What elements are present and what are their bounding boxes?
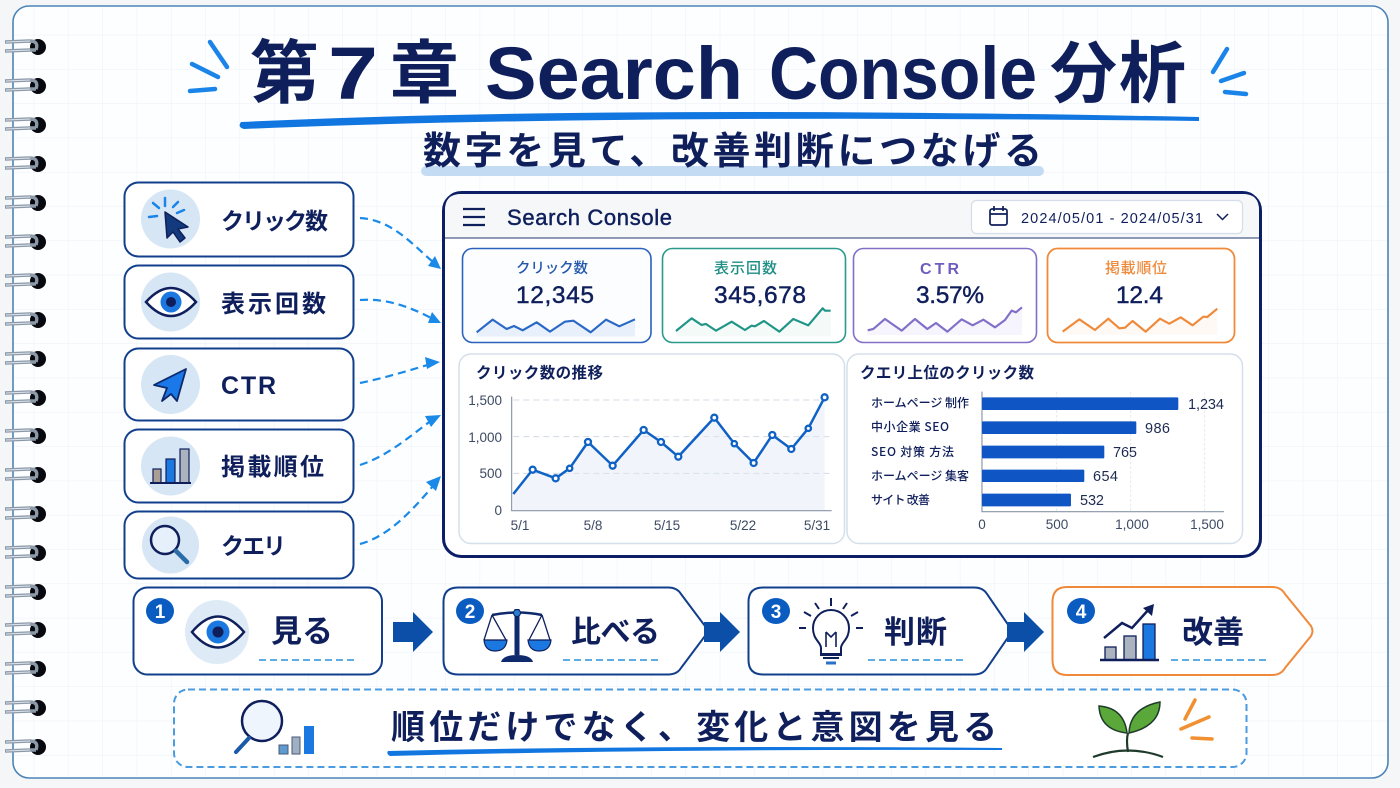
title: 析 <box>1119 20 1186 117</box>
title underline <box>240 112 1199 129</box>
title: Console <box>769 32 1037 115</box>
KPI card: CTR <box>854 248 1036 342</box>
bar values: 986 <box>1145 421 1170 437</box>
subtitle highlight <box>421 166 1044 176</box>
KPI card: 掲載順位 <box>1048 248 1234 342</box>
step 3: 判断 <box>748 588 1010 674</box>
date range selector: 2024/05/01 - 2024/05/31 <box>1021 211 1203 227</box>
x axis labels <box>511 518 830 533</box>
KPI card: クリック数: 12,345 <box>516 282 594 309</box>
icon: title sparks left <box>190 42 227 91</box>
badge 4: 4 <box>1076 602 1087 623</box>
panel: dashboard <box>444 192 1260 556</box>
metric: クエリ: クエリ <box>221 527 286 561</box>
query labels: ホームページ 制作 <box>871 394 969 411</box>
gridlines and bars <box>982 392 1224 512</box>
KPI card: クリック数 <box>462 248 651 342</box>
step 4: 改善 <box>1052 587 1312 675</box>
KPI card: 表示回数 <box>662 248 846 342</box>
panel: key message <box>174 690 1246 767</box>
icon: growth chart <box>1100 604 1159 660</box>
query labels: サイト 改善 <box>871 491 930 508</box>
icon: light bulb <box>799 598 863 663</box>
x axis labels: 5/8 <box>584 518 602 533</box>
icon: title sparks right <box>1213 49 1246 94</box>
metric: 掲載順位: 掲載順位 <box>221 447 324 482</box>
y axis labels: 0 <box>494 503 502 518</box>
KPI card: クリック数: クリック数 <box>516 257 588 278</box>
arrow 3 <box>1007 612 1044 652</box>
x axis labels: 1,000 <box>1115 517 1149 532</box>
step 1: 見る <box>134 588 382 674</box>
query labels: ホームページ 集客 <box>871 467 969 484</box>
query labels: 中小企業 SEO <box>871 418 949 435</box>
subtitle: 数字を見て、改善判断につなげる <box>423 120 1042 175</box>
KPI card: CTR: 3.57% <box>916 282 984 309</box>
query labels <box>871 394 969 508</box>
x axis labels: 500 <box>1046 517 1068 532</box>
metric: CTR: CTR <box>221 372 276 400</box>
KPI card: 掲載順位: 掲載順位 <box>1105 257 1167 278</box>
x axis labels <box>978 517 1224 532</box>
line plot <box>512 394 832 511</box>
metric: 表示回数 <box>124 266 354 338</box>
dashboard header <box>445 194 1259 238</box>
title: 7 <box>328 32 378 115</box>
date range selector <box>972 200 1242 234</box>
chart title: クエリ上位のクリック数 <box>860 361 1034 383</box>
badge 1 <box>146 598 174 624</box>
badge 2: 2 <box>465 602 475 623</box>
icon: balance scale <box>484 609 551 662</box>
step 3: 判断: 判断 <box>884 607 947 652</box>
title: 第 <box>250 17 319 117</box>
icon: eye <box>185 600 249 664</box>
icon: menu <box>463 209 485 225</box>
y axis labels <box>468 393 502 518</box>
badge 3: 3 <box>771 602 781 623</box>
step 2: 比べる: 比べる <box>571 607 660 651</box>
panel: bar chart <box>847 354 1242 544</box>
arrows: metrics to dashboard <box>360 218 433 544</box>
x axis labels: 5/31 <box>804 518 830 533</box>
arrowheads <box>425 256 441 491</box>
icon: orange sparks <box>1181 700 1212 739</box>
y axis labels: 1,500 <box>468 393 502 408</box>
KPI card: 表示回数: 345,678 <box>714 282 806 309</box>
KPI card: 掲載順位: 12.4 <box>1116 282 1163 309</box>
step 1: 見る: 見る <box>271 606 333 651</box>
panel: line chart <box>459 354 844 544</box>
bar values: 532 <box>1080 493 1104 509</box>
message text: 順位だけでなく、変化と意図を見る <box>391 700 997 749</box>
metric: 掲載順位 <box>124 430 354 502</box>
bar values <box>1080 397 1224 509</box>
icon: magnifier with bars <box>236 701 314 754</box>
y axis labels: 500 <box>479 466 502 481</box>
bar values: 1,234 <box>1188 397 1224 413</box>
metric: 表示回数: 表示回数 <box>221 284 326 319</box>
arrow 1 <box>393 612 433 652</box>
metric: クリック数 <box>124 182 354 256</box>
title: Search <box>485 32 743 115</box>
badge 4 <box>1067 598 1095 624</box>
step 4: 改善: 改善 <box>1182 607 1244 652</box>
badge 1: 1 <box>155 602 166 623</box>
arrow 2 <box>704 612 740 652</box>
x axis labels: 0 <box>978 517 986 532</box>
badge 2 <box>456 598 484 624</box>
x axis labels: 5/22 <box>730 518 756 533</box>
badge 3 <box>762 598 790 624</box>
title: 分 <box>1050 20 1117 117</box>
icon: sprout <box>1093 702 1163 757</box>
title: 章 <box>390 17 459 117</box>
message underline <box>387 747 1002 756</box>
x axis labels: 1,500 <box>1190 517 1224 532</box>
bar values: 654 <box>1093 469 1118 485</box>
bar values: 765 <box>1113 445 1137 461</box>
step 2: 比べる <box>444 588 706 674</box>
chart title: クリック数の推移 <box>476 361 603 383</box>
app name: Search Console <box>507 205 672 230</box>
KPI card: 表示回数: 表示回数 <box>714 257 777 278</box>
query labels: SEO 対策 方法 <box>871 443 954 460</box>
metric: CTR <box>124 348 354 420</box>
x axis labels: 5/15 <box>654 518 680 533</box>
panel: metric list <box>124 182 354 578</box>
KPI card: CTR: CTR <box>920 261 959 278</box>
x axis labels: 5/1 <box>511 518 529 533</box>
y axis labels: 1,000 <box>468 430 502 445</box>
metric: クエリ <box>124 512 354 578</box>
metric: クリック数: クリック数 <box>221 202 328 236</box>
spiral binding <box>5 39 46 755</box>
title <box>250 17 1186 117</box>
